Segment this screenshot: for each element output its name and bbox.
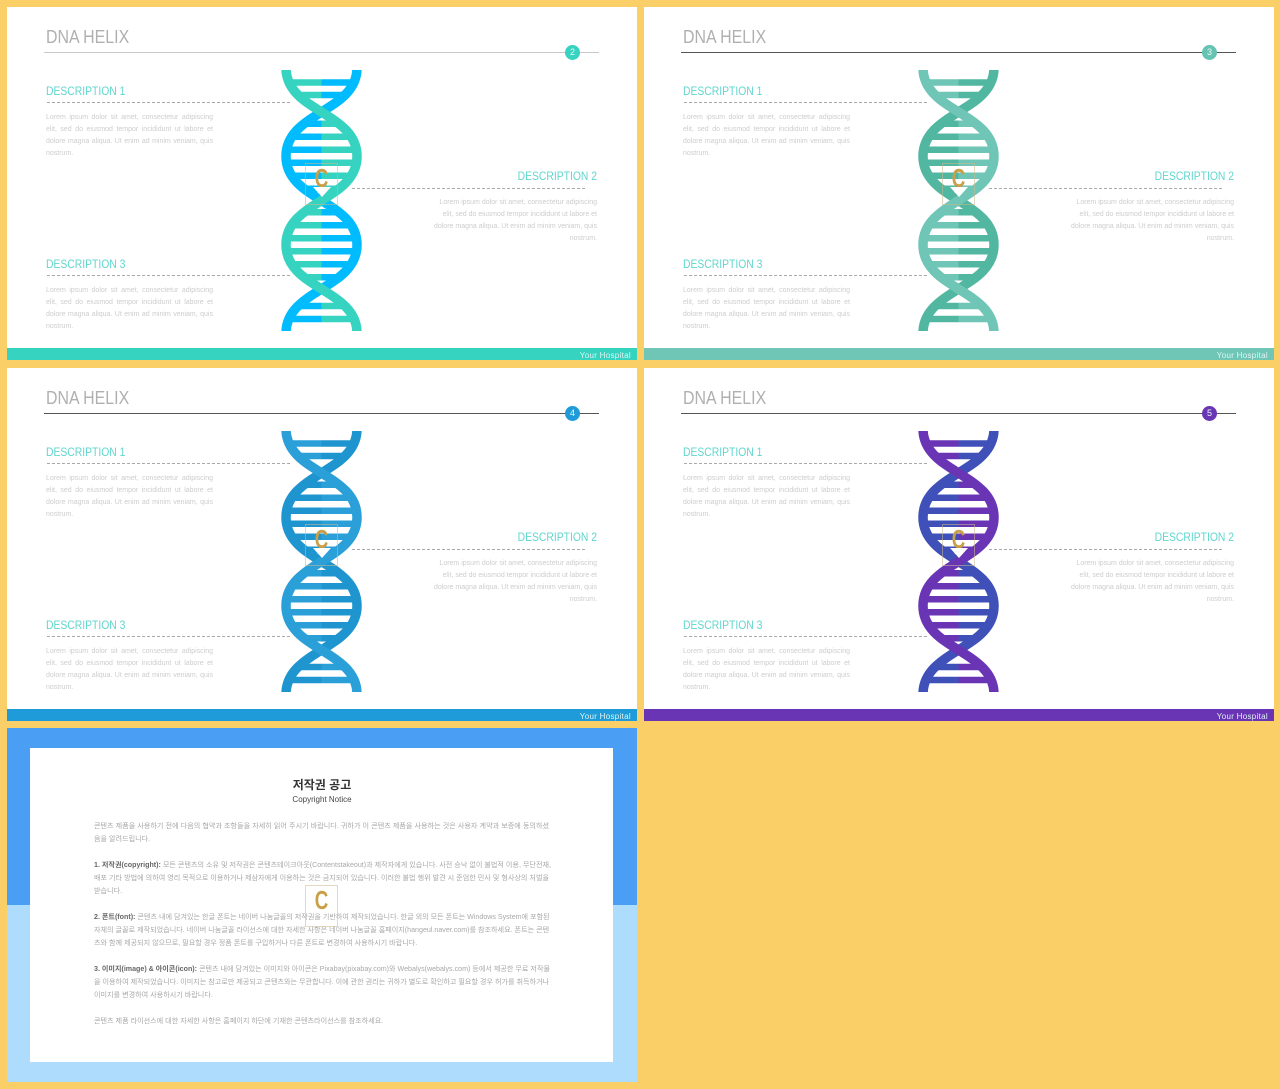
page number badge [565, 45, 580, 60]
panel: DNA helix purple: Lorem ipsum dolor sit amet, consectetur adipiscing [683, 648, 850, 654]
description 3 [683, 620, 850, 690]
page number badge: 3 [1207, 47, 1212, 57]
notice body text: 자체의 글꼴로 제작되었습니다. 네이버 나눔글꼴 라이선스에 대한 자세한 사항은 네이버 나눔글꼴 홈페이지(hangeul.naver.com)를 참조하세요. 폰트는 콘텐 [94, 926, 549, 934]
title: DNA HELIX [683, 27, 766, 47]
panel: DNA helix purple: DESCRIPTION 3 [683, 620, 762, 632]
icon: DNA helix [918, 431, 999, 692]
panel: DNA helix purple: Lorem ipsum dolor sit amet, consectetur adipiscing [1076, 560, 1234, 566]
panel: DNA helix teal and blue: elit, sed do eiusmod tempor incididunt ut labore et [443, 210, 597, 218]
panel: DNA helix green: nostrum. [683, 150, 710, 156]
panel: DNA helix teal and blue: Lorem ipsum dolor sit amet, consectetur adipiscing [46, 114, 213, 120]
leader line 1 [47, 102, 290, 103]
notice body text [94, 822, 551, 1025]
panel: DNA helix green: Lorem ipsum dolor sit amet, consectetur adipiscing [683, 286, 850, 294]
title: DNA HELIX [683, 388, 766, 408]
footer bar: Your Hospital [580, 712, 631, 720]
panel: DNA helix green [644, 7, 1274, 360]
title: DNA HELIX [46, 388, 129, 408]
panel: DNA helix green: dolore magna aliqua. Ut enim ad minim veniam, quis [683, 310, 850, 318]
panel: DNA helix green: dolore magna aliqua. Ut enim ad minim veniam, quis [683, 138, 850, 144]
leader line 2 [989, 188, 1222, 189]
panel: DNA helix blue: dolore magna aliqua. Ut enim ad minim veniam, quis [434, 584, 597, 590]
leader line 2 [352, 188, 585, 189]
panel: DNA helix teal and blue: elit, sed do eiusmod tempor incididunt ut labore et [46, 126, 213, 132]
leader line 3 [684, 274, 927, 276]
notice heading: 저작권 공고 [293, 778, 351, 792]
watermark [305, 885, 338, 927]
watermark: C [952, 163, 965, 193]
description 2 [1071, 532, 1234, 602]
panel: DNA helix blue: Lorem ipsum dolor sit amet, consectetur adipiscing [439, 560, 597, 566]
panel: DNA helix teal and blue: DESCRIPTION 2 [518, 171, 597, 183]
icon: DNA helix [281, 431, 362, 692]
page number badge [565, 406, 580, 421]
description 3 [46, 620, 213, 690]
watermark: C [315, 163, 328, 193]
notice body text: 을 이용하여 제작되었습니다. 이미지는 참고로만 제공되고 콘텐츠와는 무관합니다. 이에 관한 권리는 귀하가 별도로 확인하고 필요할 경우 허가를 취득하거나 [94, 978, 549, 986]
panel: DNA helix blue: elit, sed do eiusmod tempor incididunt ut labore et [46, 660, 213, 666]
description 2 [434, 532, 597, 602]
page number badge: 2 [570, 47, 575, 57]
panel: DNA helix purple: DESCRIPTION 2 [1155, 532, 1234, 544]
panel: DNA helix teal and blue: elit, sed do eiusmod tempor incididunt ut labore et [46, 298, 213, 306]
watermark [942, 163, 975, 205]
title rule [681, 412, 1236, 414]
footer bar [7, 348, 637, 360]
page number badge [1202, 406, 1217, 421]
description 3 [683, 259, 850, 330]
leader line 2 [989, 548, 1222, 550]
footer bar [7, 709, 637, 721]
panel: DNA helix blue: Lorem ipsum dolor sit amet, consectetur adipiscing [46, 648, 213, 654]
panel: DNA helix green: nostrum. [683, 322, 710, 330]
panel: DNA helix blue: Lorem ipsum dolor sit amet, consectetur adipiscing [46, 474, 213, 482]
watermark: C [315, 885, 328, 915]
panel: DNA helix teal and blue: dolore magna aliqua. Ut enim ad minim veniam, quis [46, 310, 213, 318]
panel: DNA helix blue: elit, sed do eiusmod tempor incididunt ut labore et [46, 486, 213, 494]
page number badge: 4 [570, 408, 575, 418]
description 2 [434, 171, 597, 242]
leader line 1 [684, 102, 927, 103]
panel: DNA helix blue: DESCRIPTION 2 [518, 532, 597, 544]
icon: DNA helix [918, 70, 999, 331]
description 2 [1071, 171, 1234, 242]
icon: DNA helix [281, 70, 362, 331]
notice body text: 음을 알려드립니다. [94, 835, 150, 843]
watermark [305, 524, 338, 566]
panel: DNA helix blue: nostrum. [46, 510, 73, 518]
panel: DNA helix teal and blue: nostrum. [46, 322, 73, 330]
panel: copyright notice [7, 728, 637, 1082]
leader line 3 [47, 636, 290, 637]
notice body text: 이미지를 변경하여 사용하시기 바랍니다. [94, 991, 213, 999]
panel: DNA helix teal and blue: DESCRIPTION 3 [46, 259, 125, 271]
leader line 3 [47, 274, 290, 276]
notice card [30, 748, 613, 1062]
panel: DNA helix purple: nostrum. [1207, 596, 1234, 602]
panel: DNA helix purple: dolore magna aliqua. Ut enim ad minim veniam, quis [683, 498, 850, 506]
panel: DNA helix teal and blue: nostrum. [570, 234, 597, 242]
notice body text: 배포 기타 방법에 의하여 영리 목적으로 이용하거나 제삼자에게 이용하는 것은 금지되어 있습니다. 이러한 불법 행위 발견 시 준엄한 민사 및 형사상의 처벌을 [94, 874, 549, 882]
notice body text: 콘텐츠 제품을 사용하기 전에 다음의 협약과 조항들을 자세히 읽어 주시기 바랍니다. 귀하가 이 콘텐츠 제품을 사용하는 것은 사용자 계약과 보증에 동의하셨 [94, 822, 549, 830]
panel: DNA helix blue: DESCRIPTION 1 [46, 447, 125, 459]
panel: DNA helix purple: elit, sed do eiusmod tempor incididunt ut labore et [683, 486, 850, 494]
panel: DNA helix green: DESCRIPTION 3 [683, 259, 762, 271]
panel: DNA helix green: Lorem ipsum dolor sit amet, consectetur adipiscing [683, 114, 850, 120]
panel: DNA helix purple: Lorem ipsum dolor sit amet, consectetur adipiscing [683, 474, 850, 482]
panel: DNA helix purple: dolore magna aliqua. Ut enim ad minim veniam, quis [683, 672, 850, 678]
panel: DNA helix teal and blue: dolore magna aliqua. Ut enim ad minim veniam, quis [434, 222, 597, 230]
panel: DNA helix purple: dolore magna aliqua. Ut enim ad minim veniam, quis [1071, 584, 1234, 590]
panel: DNA helix blue: elit, sed do eiusmod tempor incididunt ut labore et [443, 572, 597, 578]
footer bar: Your Hospital [580, 350, 631, 360]
panel: DNA helix green: DESCRIPTION 2 [1155, 171, 1234, 183]
leader line 2 [352, 548, 585, 550]
panel: DNA helix blue: dolore magna aliqua. Ut enim ad minim veniam, quis [46, 672, 213, 678]
page number badge: 5 [1207, 408, 1212, 418]
leader line 1 [47, 462, 290, 464]
panel: DNA helix green: elit, sed do eiusmod tempor incididunt ut labore et [1080, 210, 1234, 218]
description 1 [46, 86, 213, 156]
footer bar: Your Hospital [1217, 712, 1268, 720]
leader line 1 [684, 462, 927, 464]
panel: DNA helix green: elit, sed do eiusmod tempor incididunt ut labore et [683, 126, 850, 132]
panel: DNA helix teal and blue: nostrum. [46, 150, 73, 156]
panel: DNA helix blue: dolore magna aliqua. Ut enim ad minim veniam, quis [46, 498, 213, 506]
panel: DNA helix teal and blue: DESCRIPTION 1 [46, 86, 125, 98]
panel: DNA helix purple [644, 368, 1274, 721]
panel: DNA helix teal and blue: Lorem ipsum dolor sit amet, consectetur adipiscing [46, 286, 213, 294]
panel: DNA helix purple: nostrum. [683, 684, 710, 690]
description 1 [683, 447, 850, 518]
panel: DNA helix blue: nostrum. [46, 684, 73, 690]
description 1 [46, 447, 213, 518]
panel: DNA helix green: DESCRIPTION 1 [683, 86, 762, 98]
watermark: C [952, 524, 965, 554]
notice subheading: Copyright Notice [292, 795, 352, 804]
footer bar [644, 348, 1274, 360]
watermark [305, 163, 338, 205]
panel: DNA helix blue: nostrum. [570, 596, 597, 602]
panel: DNA helix purple: elit, sed do eiusmod tempor incididunt ut labore et [683, 660, 850, 666]
leader line 3 [684, 636, 927, 637]
title rule [44, 412, 599, 414]
panel: DNA helix green: dolore magna aliqua. Ut enim ad minim veniam, quis [1071, 222, 1234, 230]
panel: DNA helix purple: DESCRIPTION 1 [683, 447, 762, 459]
notice body text: 1. 저작권(copyright): 모든 콘텐츠의 소유 및 저작권은 콘텐츠테이크아웃(Contentstakeout)과 제작자에게 있습니다. 사전 승낙 없이 불법적 이용, 무단전재, [94, 861, 551, 869]
title rule [44, 52, 599, 53]
notice body text: 3. 이미지(image) & 아이콘(icon): 콘텐츠 내에 담겨있는 이미지와 아이콘은 Pixabay(pixabay.com)와 Webalys(webalys.com) 등에서 제공한 무료 저작물 [94, 965, 550, 973]
panel: DNA helix blue: DESCRIPTION 3 [46, 620, 125, 632]
watermark [942, 524, 975, 566]
footer bar [644, 709, 1274, 721]
watermark: C [315, 524, 328, 554]
description 3 [46, 259, 213, 330]
notice body text: 2. 폰트(font): 콘텐츠 내에 담겨있는 한글 폰트는 네이버 나눔글꼴의 저작권을 기반하여 제작되었습니다. 한글 외의 모든 폰트는 Windows System에 포함된 [94, 913, 550, 921]
panel: DNA helix blue [7, 368, 637, 721]
footer bar: Your Hospital [1217, 350, 1268, 360]
page number badge [1202, 45, 1217, 60]
title rule [681, 52, 1236, 53]
panel: DNA helix teal and blue: Lorem ipsum dolor sit amet, consectetur adipiscing [439, 198, 597, 206]
notice body text: 츠와 함께 제공되지 않으므로, 필요할 경우 정품 폰트를 구입하거나 다른 폰트로 변경하여 사용하시기 바랍니다. [94, 939, 417, 947]
panel: DNA helix green: Lorem ipsum dolor sit amet, consectetur adipiscing [1076, 198, 1234, 206]
panel: DNA helix green: nostrum. [1207, 234, 1234, 242]
panel: DNA helix teal and blue: dolore magna aliqua. Ut enim ad minim veniam, quis [46, 138, 213, 144]
panel: DNA helix teal and blue [7, 7, 637, 360]
panel: DNA helix green: elit, sed do eiusmod tempor incididunt ut labore et [683, 298, 850, 306]
notice body text: 받습니다. [94, 887, 122, 895]
notice body text: 콘텐츠 제품 라이선스에 대한 자세한 사항은 홈페이지 하단에 기재한 콘텐츠라이선스를 참조하세요. [94, 1017, 383, 1025]
description 1 [683, 86, 850, 156]
panel: DNA helix purple: elit, sed do eiusmod tempor incididunt ut labore et [1080, 572, 1234, 578]
panel: DNA helix purple: nostrum. [683, 510, 710, 518]
title: DNA HELIX [46, 27, 129, 47]
